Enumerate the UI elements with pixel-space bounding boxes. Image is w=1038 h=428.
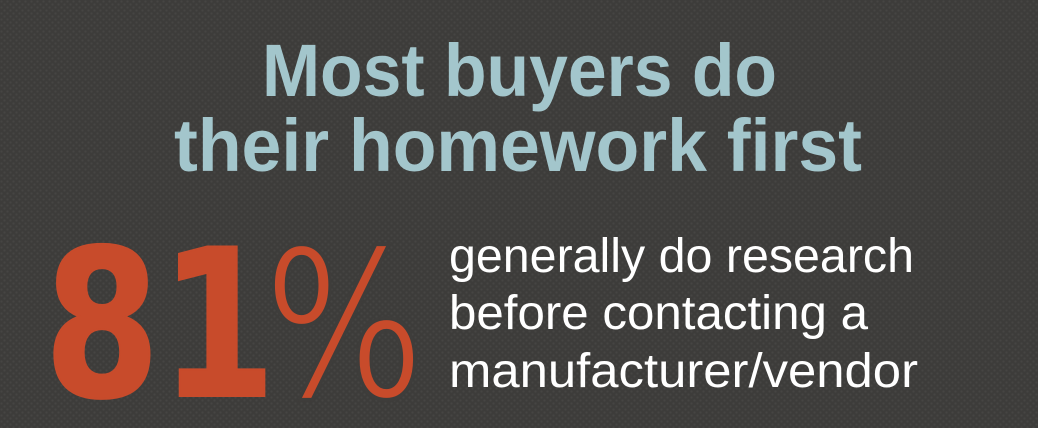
statistic: 81% — [44, 206, 424, 428]
title — [174, 29, 862, 187]
description text: manufacturer/vendor — [449, 345, 918, 398]
description text: generally do research — [449, 230, 914, 283]
title: Most buyers do — [262, 29, 777, 112]
title: their homework first — [174, 104, 862, 187]
description text: before contacting a — [449, 287, 868, 340]
description text — [449, 230, 918, 398]
